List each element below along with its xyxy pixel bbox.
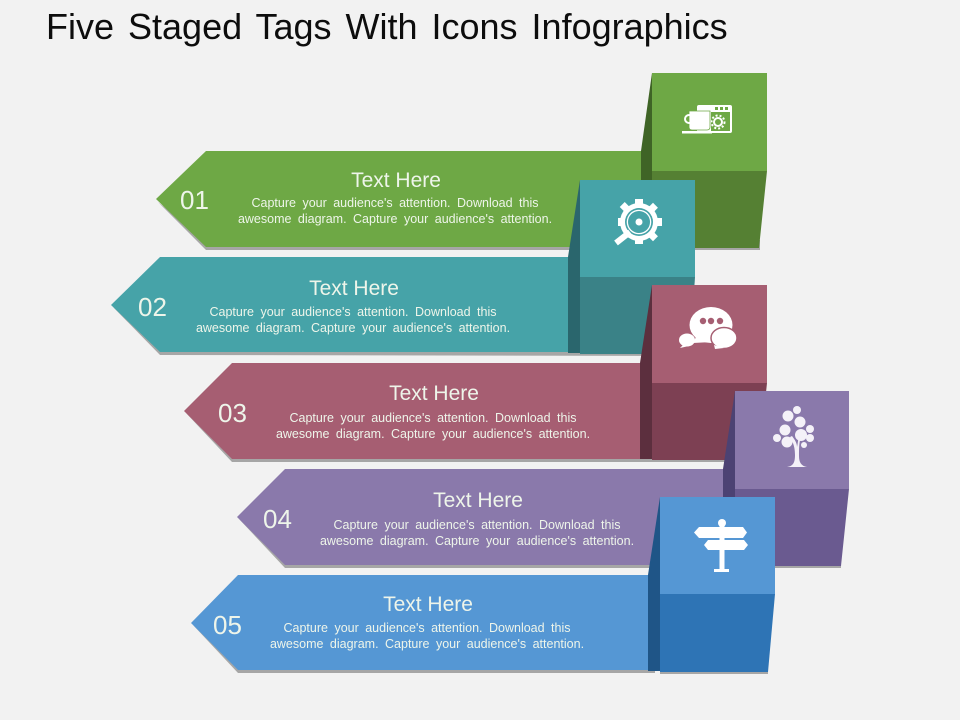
title: Five Staged Tags With Icons Infographics xyxy=(46,6,728,47)
label 04: 04 xyxy=(263,504,292,534)
label 05: 05 xyxy=(213,610,242,640)
heading 04: Text Here xyxy=(433,489,523,512)
label 02: 02 xyxy=(138,292,167,322)
body text 02: Capture your audience's attention. Download this xyxy=(210,305,496,319)
label 03: 03 xyxy=(218,398,247,428)
body text 01: awesome diagram. Capture your audience's attention. xyxy=(238,212,552,226)
body text 01: Capture your audience's attention. Download this xyxy=(252,196,538,210)
body text 04: Capture your audience's attention. Download this xyxy=(334,518,620,532)
block: green xyxy=(641,73,767,248)
tag 03: maroon xyxy=(184,285,767,462)
tag 01: green xyxy=(156,73,767,250)
tag 05: blue xyxy=(191,497,775,674)
icon: magnifier gear xyxy=(616,199,662,244)
body text 03: awesome diagram. Capture your audience's attention. xyxy=(276,427,590,441)
tag 04: purple xyxy=(237,391,849,568)
body text 03: Capture your audience's attention. Download this xyxy=(290,411,576,425)
icon: signpost xyxy=(694,519,748,572)
icon: speech bubbles xyxy=(679,307,737,349)
heading 02: Text Here xyxy=(309,277,399,300)
arrow: purple band xyxy=(237,469,727,565)
block: blue xyxy=(648,497,775,674)
arrow: teal band xyxy=(111,257,572,352)
icon: tree xyxy=(773,406,814,467)
tag 02: teal xyxy=(111,180,695,356)
body text 04: awesome diagram. Capture your audience's attention. xyxy=(320,534,634,548)
arrow: green band xyxy=(156,151,645,247)
block: maroon xyxy=(640,285,767,460)
body text 02: awesome diagram. Capture your audience's attention. xyxy=(196,321,510,335)
label 01: 01 xyxy=(180,185,209,215)
body text 05: awesome diagram. Capture your audience's attention. xyxy=(270,637,584,651)
arrow: blue band xyxy=(191,575,652,670)
body text 05: Capture your audience's attention. Download this xyxy=(284,621,570,635)
block: purple xyxy=(723,391,849,568)
heading 01: Text Here xyxy=(351,169,441,192)
block: teal xyxy=(568,180,695,354)
heading 03: Text Here xyxy=(389,382,479,405)
icon: cup and gear window xyxy=(682,105,732,134)
arrow: maroon band xyxy=(184,363,644,459)
heading 05: Text Here xyxy=(383,593,473,616)
